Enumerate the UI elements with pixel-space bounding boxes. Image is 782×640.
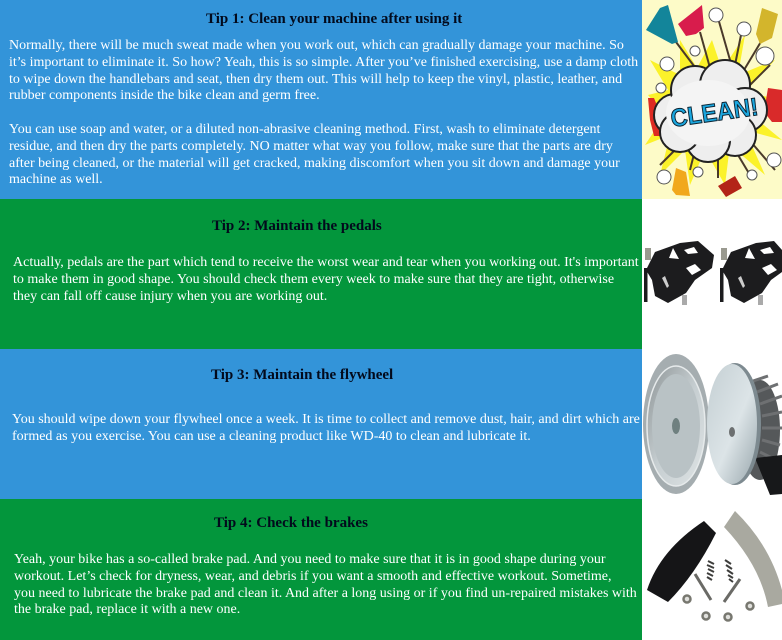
panel: tip 1 [0,0,642,199]
puffs [656,8,781,184]
text block: tip 1 second paragraph: after being cleaned, or the material will get cracked, making discomfort when you sit down and damage your [9,156,620,171]
panel: tip 4 [0,499,642,640]
disc large [643,354,709,494]
text block: tip 4 body: the brake pad, replace it with a new one. [14,602,240,617]
text block: tip 3 body: formed as you exercise. You can use a cleaning product like WD-40 to clean and lubricate it. [12,429,531,444]
pedal right [720,241,782,305]
image: flywheel [642,349,782,499]
text block: tip 2 body: they can fall off cause injury when you are working out. [13,289,327,304]
cloud [654,60,767,162]
washers [684,596,754,620]
image: brake parts [642,499,782,640]
dustpan [678,5,704,36]
broom [756,8,778,44]
gear [740,376,782,495]
heading: tip 4: Tip 4: Check the brakes [214,515,368,531]
text block: tip 4 body [14,552,637,617]
text block: tip 1 second paragraph: residue, and then dry the parts completely. NO matter what way you follow, make sure that the parts are dry [9,139,613,154]
clean word: CLEAN! [669,93,760,133]
text block: tip 1 second paragraph [9,122,620,187]
bolts [695,574,740,602]
text block: tip 1 first paragraph [9,38,638,103]
text block: tip 3 body [12,412,640,444]
sponge [718,176,742,197]
black brake pad [647,521,716,602]
heading: tip 1: Tip 1: Clean your machine after using it [206,11,462,27]
text block: tip 1 first paragraph: Normally, there will be much sweat made when you work out, which can gradually damage your machine. So [9,38,624,53]
text block: tip 3 body: You should wipe down your flywheel once a week. It is time to collect and remove dust, hair, and dirt which are [12,412,640,427]
heading: tip 3: Tip 3: Maintain the flywheel [211,367,393,383]
panel: tip 2 [0,199,642,349]
springs [707,560,733,582]
text block: tip 1 second paragraph: machine as well. [9,172,103,187]
panel: tip 3 [0,349,642,499]
text block: tip 2 body: Actually, pedals are the part which tend to receive the worst wear and tear when you working out. It's important [13,255,639,270]
spray bottle [648,98,666,136]
text block: tip 1 first paragraph: rubber components inside the bike clean and germ free. [9,88,320,103]
text block: tip 4 body: you need to lubricate the brake pad and clean it. And after a long using or if you find un-repaired mistakes with [14,586,637,601]
image: pedals [642,199,782,349]
pedal left [644,241,714,305]
text block: tip 1 second paragraph: You can use soap and water, or a diluted non-abrasive cleaning method. First, wash to eliminate detergent [9,122,601,137]
text block: tip 4 body: workout. Let’s check for dryness, wear, and debris if you want a smooth and effective workout. Sometime, [14,569,612,584]
image: clean cartoon [642,0,782,199]
text block: tip 2 body: to make them in good shape. You should check them every week to make sure that they are tight, otherwise [13,272,614,287]
heading: tip 2: Tip 2: Maintain the pedals [212,218,382,234]
text block: tip 2 body [13,255,639,304]
grey brake pad [724,511,782,607]
disc small [707,363,761,485]
bucket [764,88,782,122]
text block: tip 4 body: Yeah, your bike has a so-called brake pad. And you need to make sure that it is in good shape during your [14,552,606,567]
text block: tip 1 first paragraph: it’s important to eliminate it. So how? Yeah, this is so simple. After you’ve finished exercising, use a damp cloth [9,55,638,70]
text block: tip 1 first paragraph: to wipe down the handlebars and seat, then dry them out. This will help to keep the vinyl, plastic, leather, and [9,72,622,87]
mop bottom [672,168,690,196]
mop [646,5,678,44]
